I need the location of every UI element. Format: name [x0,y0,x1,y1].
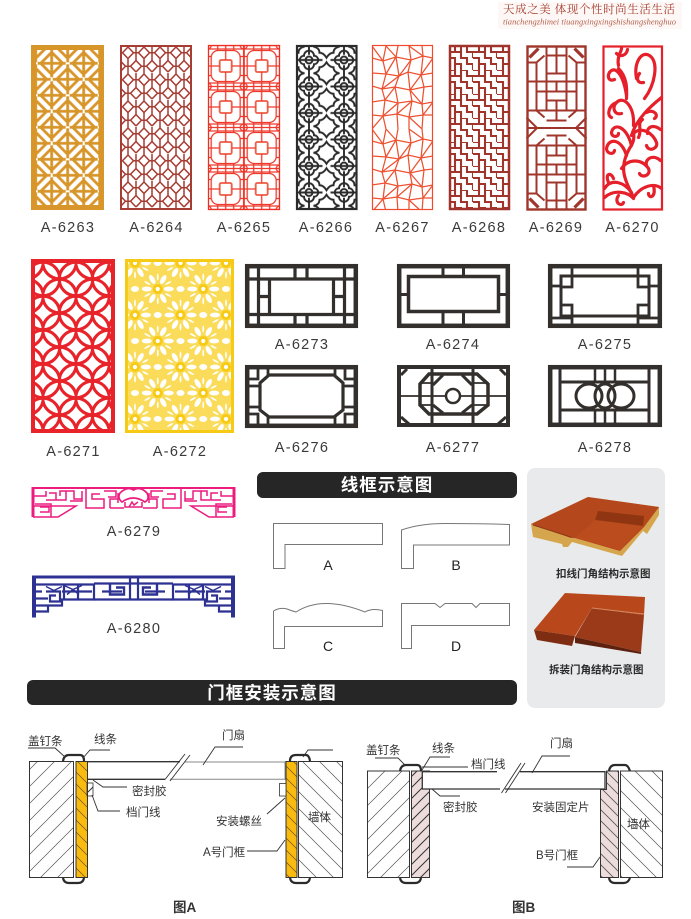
labels A: 档门线 [126,805,161,819]
panel A-6271 [33,261,113,460]
panel A-6266: A-6266 [299,220,353,236]
profile C [274,603,382,654]
profile A [274,524,382,573]
panel A-6268 [450,46,509,236]
cover strips [400,765,630,883]
frame A-6278 [550,367,660,456]
brand slogan: 天成之美 体现个性时尚生活生活 [503,2,676,16]
heading: 门框安装示意图 [27,680,517,705]
lintel A-6280 [32,576,235,637]
caption: snap-line door corner: 扣线门角结构示意图 [556,567,650,580]
leader lines [375,756,600,867]
labels B [366,736,650,862]
lintel A-6280: A-6280 [107,621,161,637]
profile A: A [323,557,333,573]
labels B: 档门线 [471,757,506,771]
panel A-6271: A-6271 [46,444,101,460]
brand slogan: tianchengzhimei tiuangxingxingshishangshenghuo [503,16,676,26]
panel A-6268: A-6268 [452,220,506,236]
caption: detachable door corner: 拆装门角结构示意图 [549,663,644,676]
frame A-6273 [245,266,358,353]
panel A-6264 [121,46,191,236]
panel A-6269 [526,46,586,236]
labels B: 盖钉条 [366,743,401,757]
frame A-6274 [399,266,508,353]
profile D [402,604,510,654]
panel A-6264: A-6264 [129,220,184,236]
panel A-6263 [34,48,102,236]
frame A-6273: A-6273 [275,337,329,353]
panel A-6263: A-6263 [41,220,95,236]
lintel A-6279 [32,487,235,540]
frame A-6275: A-6275 [578,337,632,353]
labels B: 墙体 [627,817,650,831]
panel A-6270 [604,46,662,236]
right pink frame [600,771,618,878]
panel A-6267 [372,46,432,236]
labels A: A号门框 [203,845,246,859]
panel A-6267: A-6267 [375,220,430,236]
panel: door corner structures [527,468,665,708]
labels A: 安装螺丝 [216,814,262,828]
left wall [30,762,74,878]
panel A-6269: A-6269 [529,220,583,236]
wood corner: detachable [534,593,645,654]
right yellow frame [286,762,297,878]
frame A-6274: A-6274 [426,337,480,353]
labels B: 安装固定片 [532,800,590,814]
caption 图A: 图A [173,900,196,915]
brand slogan [498,2,682,29]
left pink frame [412,771,430,878]
caption 图B: 图B [512,900,536,915]
right wall [298,762,342,878]
frame A-6276 [247,367,356,456]
profile B [402,524,510,573]
labels A: 门扇 [222,728,245,742]
panel A-6265: A-6265 [217,220,271,236]
profile D: D [451,638,461,654]
profile B: B [451,557,461,573]
door stops [87,783,286,796]
diagram: figure B [366,736,662,915]
profile C: C [323,638,333,654]
heading: 门框安装示意图: 门框安装示意图 [207,683,337,703]
left yellow frame [76,762,88,878]
door leaf [422,763,605,793]
heading: 线框示意图 [257,472,517,498]
left wall [368,771,410,878]
labels B: 门扇 [550,736,573,750]
diagram: figure A [28,728,342,915]
panel A-6272 [126,260,232,460]
frame A-6277 [399,367,508,456]
frame A-6278: A-6278 [578,440,632,456]
labels A: 墙体 [308,810,331,824]
wood corner: snap-line [531,497,659,556]
frame A-6277: A-6277 [426,440,480,456]
lintel A-6279: A-6279 [107,524,161,540]
labels A: 线条 [94,732,117,746]
panel A-6265 [208,45,280,236]
leader lines [28,747,333,851]
labels A: 密封胶 [132,784,167,798]
frame A-6275 [550,266,660,353]
door leaf [87,754,285,781]
labels A [28,728,331,859]
right wall [620,771,662,878]
panel A-6266 [297,46,356,236]
frame A-6276: A-6276 [275,440,329,456]
panel A-6272: A-6272 [153,444,207,460]
cover strips [63,755,310,883]
labels A: 盖钉条 [28,734,63,748]
labels B: B号门框 [536,848,579,862]
labels B: 线条 [432,741,455,755]
heading: 线框示意图: 线框示意图 [341,475,433,495]
panel A-6270: A-6270 [605,220,660,236]
labels B: 密封胶 [443,800,478,814]
frame profiles diagram [274,524,510,654]
